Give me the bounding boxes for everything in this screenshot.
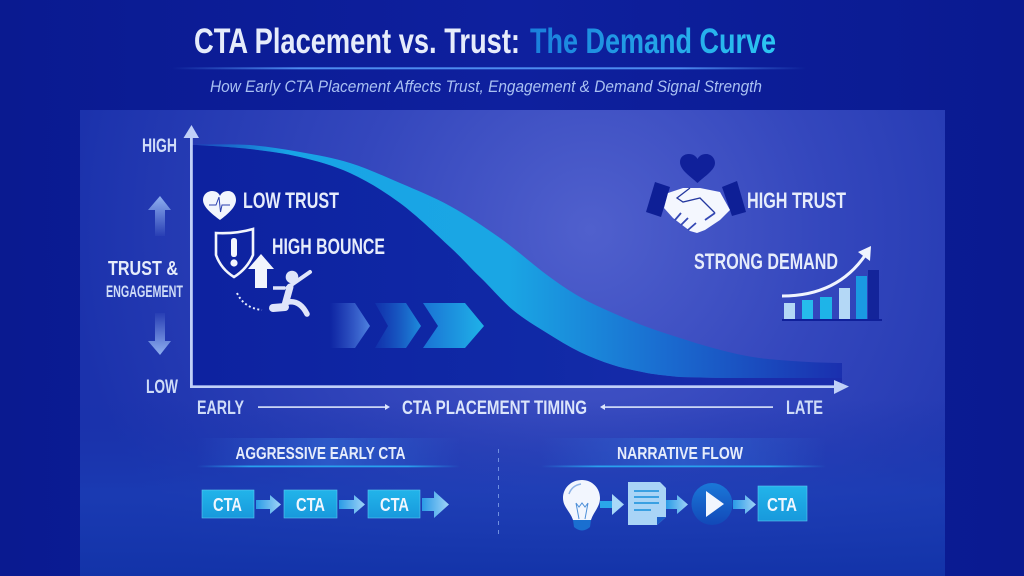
heading: AGGRESSIVE EARLY CTA (236, 443, 406, 463)
CTA box 2 (284, 490, 337, 518)
rule (541, 466, 826, 467)
rule (197, 466, 460, 467)
heading: NARRATIVE FLOW (617, 443, 743, 463)
y label: high: HIGH (142, 136, 177, 157)
chart: rising bars (782, 270, 882, 321)
x label: early: EARLY (197, 398, 244, 419)
icon: light bulb (563, 480, 600, 530)
arrow: late to centre (600, 404, 773, 410)
arrow: early to centre (258, 404, 390, 410)
arrow (733, 495, 756, 514)
arrow 1 (256, 495, 281, 514)
y label: trust and engagement: ENGAGEMENT (106, 283, 183, 301)
arrow (600, 494, 624, 515)
area under curve (192, 145, 842, 385)
title: CTA Placement vs. Trust: (194, 22, 520, 61)
subtitle: How Early CTA Placement Affects Trust, Engagement & Demand Signal Strength (210, 77, 762, 96)
strong demand label: STRONG DEMAND (694, 249, 838, 274)
title: The Demand Curve (530, 22, 776, 61)
icon: warning shield (216, 229, 253, 277)
chart: demand curve (192, 144, 842, 385)
arrow 3 (422, 491, 449, 518)
CTA box 4: CTA (767, 494, 797, 515)
dashed divider (498, 449, 500, 537)
icon: play button (692, 483, 732, 525)
high trust label: HIGH TRUST (747, 188, 846, 213)
icon: arrow down (148, 313, 171, 355)
y axis (184, 125, 199, 388)
title rule (172, 67, 806, 69)
y label: trust and engagement (106, 258, 183, 301)
CTA box 1 (202, 490, 254, 518)
x axis (190, 380, 849, 394)
high bounce label: HIGH BOUNCE (272, 234, 385, 259)
CTA box 3: CTA (380, 494, 409, 515)
y label: low: LOW (146, 377, 178, 398)
icon: heart with pulse (203, 191, 236, 220)
section header band (541, 438, 826, 466)
y label: trust and engagement: TRUST & (108, 258, 178, 280)
curve band (197, 144, 842, 378)
icon: running figure (273, 271, 310, 314)
CTA box 3 (368, 490, 420, 518)
CTA box 1: CTA (213, 494, 242, 515)
panel: aggressive early CTA (197, 438, 460, 518)
panel: chart background (80, 110, 945, 576)
arrow (666, 495, 688, 514)
icon: dotted trail (237, 293, 262, 310)
icon: handshake (646, 181, 746, 233)
CTA box 2: CTA (296, 494, 325, 515)
arrow 2 (339, 495, 365, 514)
panel: narrative flow (541, 438, 826, 530)
icon: arrow up (148, 196, 171, 236)
low trust label: LOW TRUST (243, 188, 339, 213)
CTA box 4 (758, 486, 807, 521)
icon: document (628, 482, 666, 525)
icon: heart (680, 154, 715, 183)
icon: bounce arrow up (248, 254, 274, 288)
chevrons (330, 303, 484, 348)
x label: timing: CTA PLACEMENT TIMING (402, 398, 587, 419)
section header band (197, 438, 460, 466)
x label: late: LATE (786, 398, 823, 419)
icon: rising arrow (782, 246, 871, 296)
